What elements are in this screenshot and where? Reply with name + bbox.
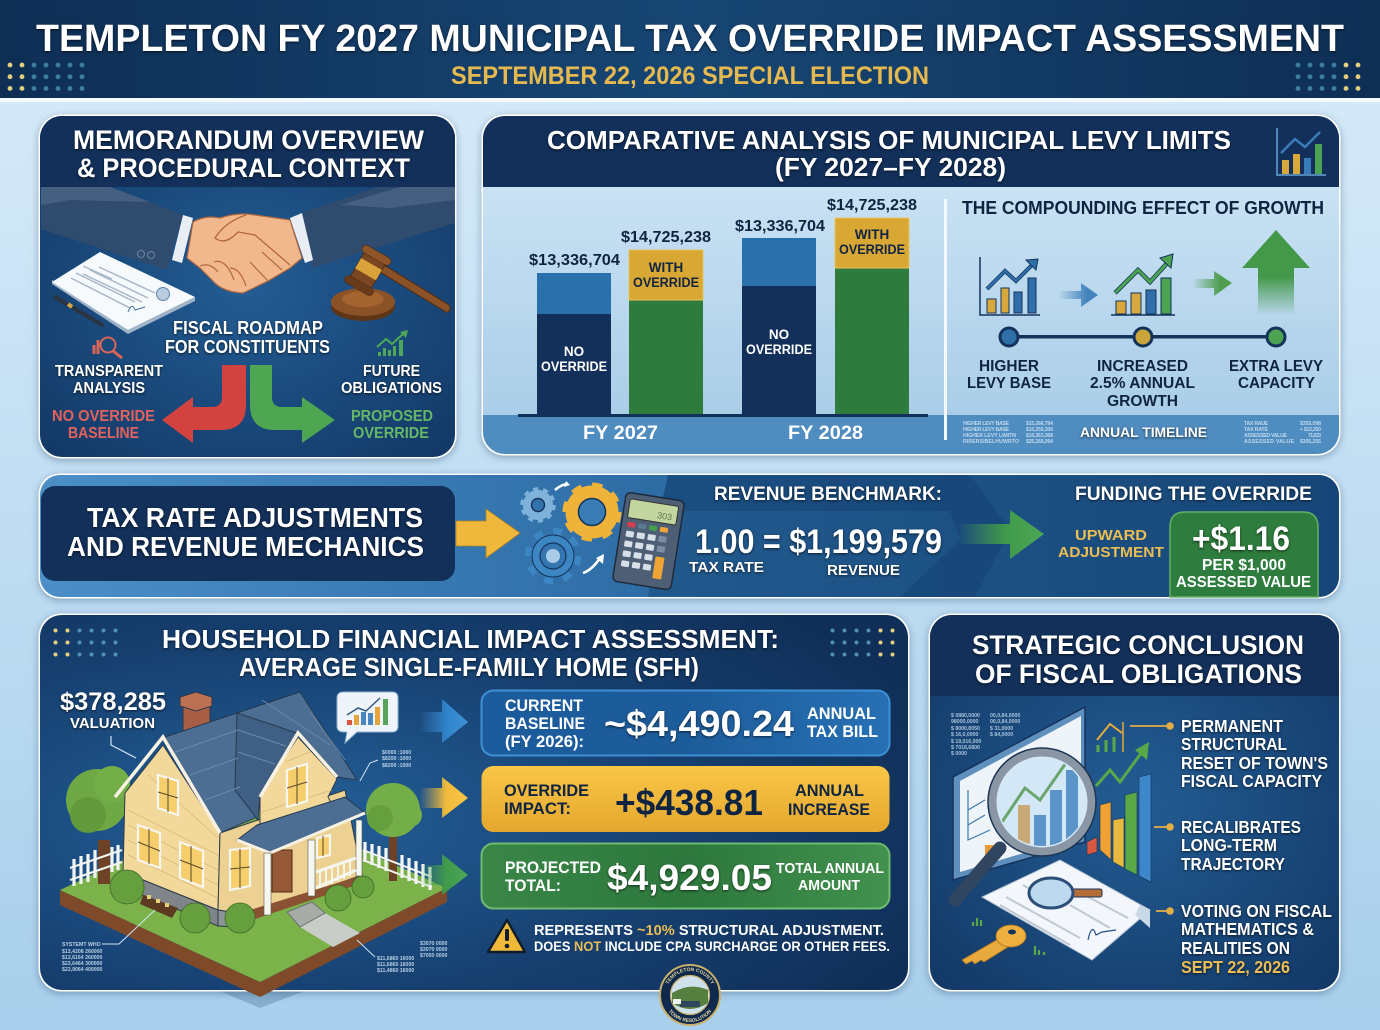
label: increased annual growth: 2.5% ANNUAL (1090, 375, 1195, 392)
arrow: gold to override row (420, 777, 468, 818)
heading: comparative analysis: COMPARATIVE ANALYSIS OF MUNICIPAL LEVY LIMITS (547, 125, 1231, 155)
bar: FY 2027 no override (537, 273, 611, 415)
revenue benchmark: REVENUE BENCHMARK: (714, 484, 942, 505)
fine print: left table: RIRERSIBELHUWRTO (963, 439, 1019, 445)
point: permanent structural reset: PERMANENT (1181, 716, 1283, 736)
illustration: analysis monitor and magnifier (951, 707, 1151, 964)
arrow: green to total row (420, 854, 468, 895)
illustration: house (60, 692, 447, 997)
fine print callouts (62, 750, 448, 974)
panel: household impact (38, 614, 910, 1008)
funding the override: UPWARD (1075, 527, 1147, 544)
fine print callouts: SYSTEMT WHO (62, 942, 101, 948)
label: proposed override: PROPOSED (351, 408, 433, 425)
fine print: $ 19,016,000 (951, 739, 981, 745)
fine print: $ 0000 (951, 751, 967, 757)
row: current baseline: (FY 2026): (505, 733, 584, 751)
label: higher levy base: HIGHER (979, 358, 1039, 375)
icon: town seal: TOWN RESOLUTION (669, 1009, 712, 1022)
icon: key (962, 925, 1026, 964)
row: current baseline: ANNUAL (807, 705, 876, 723)
fine print: right table: 71,633 (1308, 433, 1321, 439)
bars (1087, 774, 1151, 882)
arrow: extra capacity up (1242, 230, 1310, 315)
row: projected total: AMOUNT (798, 877, 860, 894)
label: increased annual growth (1090, 358, 1195, 410)
fine print: $ 7018,6800 (951, 745, 980, 751)
icon: handshake (41, 187, 455, 293)
valuation label: $378,285 (60, 688, 166, 716)
fine print: $ 0880,0000 (951, 713, 980, 719)
valuation label: VALUATION (70, 715, 155, 732)
icon: calculator: 303 (656, 510, 673, 522)
icon: chart in header (1277, 128, 1326, 175)
point: voting on fiscal realities: SEPT 22, 2026 (1181, 957, 1290, 977)
arrow: blue to baseline row (420, 699, 468, 743)
windows (138, 764, 330, 890)
small chart (1097, 722, 1123, 752)
text: future obligations: FUTURE (363, 363, 420, 380)
text: transparent analysis: ANALYSIS (73, 380, 145, 397)
shrubs (110, 870, 374, 933)
fine print: left table: HIGHER LEVY LIMITN (963, 433, 1016, 439)
row: current baseline: BASELINE (505, 715, 585, 733)
bar: FY 2028 with override (835, 218, 909, 415)
point: voting on fiscal realities (1181, 901, 1332, 977)
fine print callouts: $13,6164 260000 (62, 955, 103, 961)
label: no override baseline (52, 408, 155, 442)
bar: FY 2028 no override: NO (769, 327, 789, 342)
arrow: red to no override (162, 365, 246, 443)
label: proposed override (351, 408, 433, 442)
connector: third point (1156, 907, 1174, 915)
bar: FY 2028 no override (742, 238, 816, 415)
row: current baseline (482, 690, 890, 756)
arrow: gold into mechanics (456, 509, 520, 558)
fine print (951, 713, 1020, 757)
row: override impact: +$438.81 (615, 782, 763, 823)
label: no override baseline: BASELINE (68, 425, 139, 442)
point: permanent structural reset: FISCAL CAPACITY (1181, 771, 1322, 791)
heading: memorandum overview: MEMORANDUM OVERVIEW (73, 125, 425, 155)
title: TEMPLETON FY 2027 MUNICIPAL TAX OVERRIDE IMPACT ASSESSMENT (36, 18, 1344, 60)
label: increased annual growth: GROWTH (1107, 393, 1178, 410)
heading: comparative analysis: (FY 2027–FY 2028) (775, 152, 1006, 182)
point: recalibrates trajectory (1181, 817, 1301, 874)
bar: FY 2027 with override: OVERRIDE (633, 275, 699, 290)
porch (237, 797, 365, 927)
fine print: left table: $25,268,094 (1026, 439, 1053, 445)
icon: chart speech bubble (337, 692, 398, 743)
bar: FY 2027 no override: NO (564, 344, 584, 359)
row: current baseline: TAX BILL (807, 723, 878, 741)
row: override impact (482, 766, 890, 832)
icon: warning (488, 920, 525, 952)
text: future obligations: OBLIGATIONS (341, 380, 442, 397)
label: extra levy capacity (1229, 358, 1323, 392)
row: projected total: PROJECTED (505, 859, 601, 877)
bar: FY 2027 no override: OVERRIDE (541, 359, 607, 374)
revenue benchmark: TAX RATE (689, 559, 764, 576)
row: current baseline: CURRENT (505, 697, 583, 715)
bar: FY 2028 with override: OVERRIDE (839, 242, 905, 257)
paper (982, 860, 1150, 960)
trees (66, 766, 422, 884)
arrow: green to proposed override (250, 365, 335, 443)
fine print: $ 16,0,0000 (951, 732, 979, 738)
axis labels (583, 423, 863, 444)
bar value labels: $13,336,704 (735, 218, 825, 235)
row: projected total: TOTAL: (505, 877, 561, 895)
text: fiscal roadmap: FOR CONSTITUENTS (165, 337, 330, 357)
fine print: left table: HIGHER LEVY BASE (963, 427, 1010, 433)
row: override impact: ANNUAL (795, 782, 864, 800)
axis labels: FY 2027 (583, 423, 658, 444)
icon: calculator (612, 492, 685, 590)
icon: growth chart (377, 330, 408, 356)
heading: tax rate adjustments (41, 486, 455, 581)
label: higher levy base (967, 358, 1051, 392)
fine print: $ 8000,8050 (951, 726, 980, 732)
panel: memorandum overview (38, 114, 456, 458)
connector: first point (1130, 722, 1174, 730)
panel: tax rate adjustments and revenue mechanics (38, 474, 1340, 598)
point: recalibrates trajectory: TRAJECTORY (1181, 854, 1285, 874)
connector: second point (1154, 823, 1174, 831)
label: no override baseline: NO OVERRIDE (52, 408, 155, 425)
fine print: 00,0,84,0000 (990, 713, 1020, 719)
fine print callouts: $13,4208 260000 (62, 949, 103, 955)
fine print: left table: $15,266,794 (1026, 421, 1053, 427)
bar chart: levy limits (518, 197, 928, 444)
fine print: left table (963, 421, 1053, 445)
fine print callouts: $3070 0000 (420, 947, 448, 953)
funding the override (1058, 483, 1318, 597)
row: override impact: OVERRIDE (504, 782, 589, 800)
callout: +$1.16 per $1,000: +$1.16 (1192, 520, 1290, 558)
fine print: left table: $10,263,368 (1026, 433, 1053, 439)
funding the override: FUNDING THE OVERRIDE (1075, 483, 1312, 505)
row: projected total: $4,929.05 (607, 857, 772, 898)
row: projected total: TOTAL ANNUAL (776, 860, 884, 877)
fine print: $ 31,0000 (990, 726, 1013, 732)
chimney (180, 692, 212, 735)
icon: gavel (331, 244, 450, 321)
revenue benchmark (689, 484, 942, 579)
icon: magnifier (94, 338, 122, 358)
fine print callouts: $11,6860 16000 (377, 956, 414, 962)
fine print: right table: ASSESSED VALUE (1244, 433, 1288, 439)
bar value labels: $14,725,238 (621, 229, 711, 246)
dormer gable (260, 733, 337, 835)
arrow: blue timeline step (1059, 283, 1098, 307)
fine print: 98000,0000 (951, 719, 979, 725)
heading: comparative analysis (547, 125, 1231, 182)
point: permanent structural reset: STRUCTURAL (1181, 734, 1287, 754)
house body (123, 745, 362, 928)
fine print callouts: $8200 :1000 (382, 763, 411, 769)
point: permanent structural reset: RESET OF TOWN'S (1181, 753, 1328, 773)
bar value labels (529, 197, 917, 269)
panel: strategic conclusion (928, 614, 1340, 992)
bar: FY 2027 with override (629, 250, 703, 415)
icon: town seal (659, 964, 721, 1026)
callout: +$1.16 per $1,000: ASSESSED VALUE (1176, 574, 1311, 591)
arrow: green timeline step (1192, 271, 1232, 296)
icon: base chart (980, 257, 1040, 315)
row: override impact: INCREASE (788, 801, 870, 819)
fine print callouts: $3070 0000 (420, 941, 448, 947)
header banner (0, 0, 1380, 102)
text: fiscal roadmap: FISCAL ROADMAP (173, 318, 323, 338)
icon: signed document and pen (52, 252, 195, 334)
heading: household impact (162, 624, 779, 682)
arrow: green to funding (958, 510, 1044, 559)
fine print: right table: TAX RAUE (1244, 421, 1269, 427)
heading: memorandum overview (73, 125, 425, 183)
bar: FY 2028 no override: OVERRIDE (746, 342, 812, 357)
fine print: right table (1244, 421, 1321, 445)
fine print callouts: $23,9064 400000 (62, 967, 103, 973)
heading: household impact: HOUSEHOLD FINANCIAL IMPACT ASSESSMENT: (162, 624, 779, 654)
fine print: right table: ASSESSED VALUE (1244, 439, 1295, 445)
fine print: right table: + $12,350 (1300, 427, 1321, 433)
fine print: right table: TAX RATE (1244, 427, 1269, 433)
label: extra levy capacity: EXTRA LEVY (1229, 358, 1323, 375)
heading: tax rate adjustments: AND REVENUE MECHANICS (67, 531, 424, 562)
revenue benchmark: REVENUE (827, 562, 900, 579)
heading: tax rate adjustments: TAX RATE ADJUSTMENTS (87, 502, 423, 533)
icon: increased chart (1111, 254, 1175, 315)
fence (70, 842, 432, 890)
warning note (534, 922, 890, 954)
label: higher levy base: LEVY BASE (967, 375, 1051, 392)
bar value labels: $13,336,704 (529, 252, 620, 269)
row: current baseline: ~$4,490.24 (604, 703, 794, 744)
fine print: $ 84,0000 (990, 732, 1013, 738)
small magnifier (1029, 878, 1102, 908)
text: fiscal roadmap (165, 318, 330, 357)
icon: town seal: TEMPLETON COUNTY (665, 968, 714, 984)
point: recalibrates trajectory: LONG-TERM (1181, 835, 1277, 855)
timeline (1000, 328, 1285, 346)
heading: strategic conclusion (972, 630, 1304, 689)
heading: strategic conclusion: STRATEGIC CONCLUSION (972, 630, 1304, 660)
panel: comparative analysis (482, 114, 1340, 456)
bar: FY 2027 with override: WITH (649, 260, 683, 275)
label: annual timeline: ANNUAL TIMELINE (1080, 424, 1207, 440)
heading: memorandum overview: & PROCEDURAL CONTEXT (77, 153, 410, 183)
point: recalibrates trajectory: RECALIBRATES (1181, 817, 1301, 837)
warning note: DOES NOT INCLUDE CPA SURCHARGE OR OTHER FEES. (534, 938, 890, 954)
text: transparent analysis: TRANSPARENT (55, 363, 163, 380)
fine print callouts: $23,6464 300000 (62, 961, 103, 967)
bar: FY 2028 with override: WITH (855, 227, 889, 242)
subtitle: election date: SEPTEMBER 22, 2026 SPECIAL ELECTION (451, 62, 929, 90)
icon: gears (522, 481, 618, 581)
fine print: left table: $15,250,308 (1026, 427, 1053, 433)
fine print: right table: $355,098 (1300, 421, 1321, 427)
funding the override: ADJUSTMENT (1058, 544, 1164, 561)
bar value labels: $14,725,238 (827, 197, 917, 214)
heading: strategic conclusion: OF FISCAL OBLIGATIONS (975, 659, 1302, 689)
row: projected total (482, 844, 890, 908)
fine print callouts: $7050 0000 (420, 953, 448, 959)
heading: compounding effect: THE COMPOUNDING EFFECT OF GROWTH (962, 197, 1324, 218)
valuation label (60, 688, 166, 732)
point: permanent structural reset (1181, 716, 1328, 791)
label: increased annual growth: INCREASED (1097, 358, 1188, 375)
text: transparent analysis (55, 363, 163, 397)
label: proposed override: OVERRIDE (353, 425, 429, 442)
axis labels: FY 2028 (788, 423, 863, 444)
fine print: left table: HIGHER LEVY BASE (963, 421, 1010, 427)
fine print: right table: $305,255 (1300, 439, 1321, 445)
roof (115, 692, 357, 833)
label: extra levy capacity: CAPACITY (1238, 375, 1315, 392)
fine print callouts: $11,4860 16000 (377, 968, 414, 974)
point: voting on fiscal realities: VOTING ON FISCAL (1181, 901, 1332, 921)
fine print callouts: $11,6860 16000 (377, 962, 414, 968)
big magnifier (955, 748, 1096, 900)
fine print: 00,0,84,0000 (990, 719, 1020, 725)
ground block (60, 800, 447, 997)
row: override impact: IMPACT: (504, 800, 571, 818)
point: voting on fiscal realities: MATHEMATICS & (1181, 919, 1314, 939)
fine print callouts: $0000 :1000 (382, 750, 411, 756)
text: future obligations (341, 363, 442, 397)
warning note: REPRESENTS ~10% STRUCTURAL ADJUSTMENT. (534, 922, 884, 939)
revenue benchmark: 1.00 = $1,199,579 (695, 523, 942, 561)
callout: +$1.16 per $1,000: PER $1,000 (1202, 557, 1286, 574)
point: voting on fiscal realities: REALITIES ON (1181, 938, 1290, 958)
callout: +$1.16 per $1,000 (1170, 512, 1318, 597)
fine print callouts: $8200 :1000 (382, 756, 411, 762)
heading: household impact: AVERAGE SINGLE-FAMILY HOME (SFH) (239, 652, 699, 682)
